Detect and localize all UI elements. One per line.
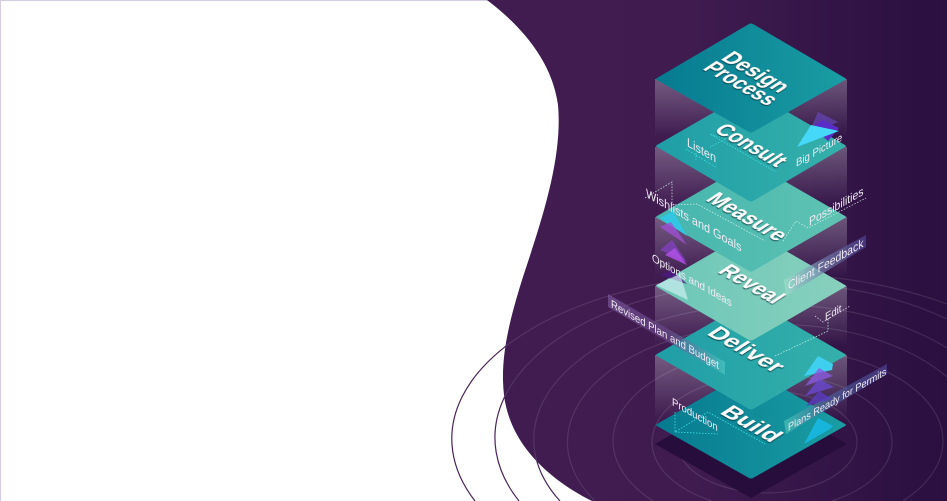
dotted connector: Deliver to Edit: [775, 318, 828, 356]
layer: Deliver: [608, 294, 846, 410]
label: Edit: Edit: [825, 303, 841, 324]
icon: stacked triangles: [804, 356, 834, 406]
band: Client Feedback: [784, 235, 866, 296]
ground shadow: [655, 389, 847, 498]
dotted connectors: Consult: [686, 134, 776, 172]
icon: build triangle: [804, 418, 833, 444]
label: Production: Production: [672, 396, 718, 434]
layer: Design Process: [656, 24, 846, 132]
outer dark rings on white: [452, 274, 947, 501]
label: Wishlists and Goals: Wishlists and Goals: [646, 186, 741, 255]
label: Options and Ideas: Options and Ideas: [652, 252, 732, 310]
concentric rings on blob: [504, 276, 947, 501]
layer: Consult: [656, 92, 846, 202]
label: Revised Plan and Budget: Revised Plan and Budget: [611, 298, 719, 372]
layer: Reveal: [652, 232, 866, 340]
dotted connectors: Build: [675, 412, 765, 444]
label: Plans Ready for Permits: Plans Ready for Permits: [788, 366, 886, 434]
layer: Measure: [645, 162, 866, 272]
icon: reveal triangles: [656, 240, 688, 300]
heading: Consult: Consult: [708, 119, 794, 171]
label: Listen: Listen: [687, 135, 716, 166]
translucent walls between layers: [655, 79, 847, 420]
dotted connectors: Measure: [645, 182, 866, 241]
heading: Measure: Measure: [701, 188, 795, 245]
icon: measure triangles: [660, 211, 687, 245]
band: Plans Ready for Permits: [784, 364, 887, 434]
heading: Design Process: Process: [697, 57, 786, 109]
layer: Build: [656, 364, 887, 478]
band: Revised Plan and Budget: [608, 294, 725, 375]
heading: Reveal: Reveal: [713, 260, 791, 307]
label: Client Feedback: Client Feedback: [788, 235, 864, 293]
label: Possibilities: Possibilities: [809, 184, 864, 229]
heading: Deliver: Deliver: [702, 322, 792, 376]
dotted bracket: Edit: [815, 306, 850, 322]
purple blob background: [487, 0, 947, 501]
heading: Build: Build: [714, 402, 789, 446]
label: Big Picture: Big Picture: [796, 131, 842, 170]
heading: Design Process: Design: [716, 47, 797, 96]
icon: Big Picture triangles: [797, 112, 839, 147]
